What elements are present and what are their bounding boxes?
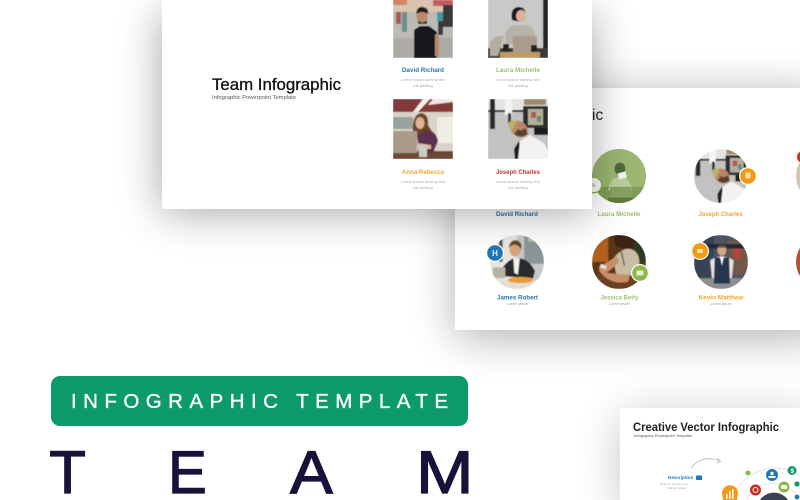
photo: Anna: [393, 99, 453, 159]
caption: Lorem Ipsum: [711, 302, 731, 306]
caption: the printing: [508, 185, 528, 190]
panel: team infographic slide: [162, 0, 592, 212]
badge: infographic template: INFOGRAPHIC TEMPLATE: [71, 390, 448, 413]
team member: James Robert: [486, 235, 544, 306]
icon: chart: [722, 485, 738, 500]
name: Joseph Charles: [496, 169, 540, 176]
team member: partial red row 1: [796, 152, 800, 190]
heading: team infographic: Team Infographic: [212, 76, 341, 94]
text: description: Master Ipsum: [668, 486, 687, 490]
text: subtitle: Infographic Powerpoint Template: [634, 434, 692, 438]
icon: user: [766, 469, 778, 481]
arrow: curved: [691, 458, 720, 468]
name: James Robert: [497, 294, 539, 302]
caption: [401, 179, 446, 190]
icon: Joseph badge: [739, 167, 757, 185]
name: David Richard: [402, 67, 444, 74]
text: description: Description: [668, 475, 693, 480]
team member: Jessica Betty: [592, 235, 649, 306]
icon: Kevin badge: [691, 242, 709, 260]
chart: radial icon arcs: $: [790, 468, 794, 475]
badge: infographic template: [51, 376, 468, 426]
caption: the printing: [413, 185, 433, 190]
icon: Laura badge: %: [591, 183, 596, 189]
photo: Laura: [488, 0, 548, 58]
caption: Lorem Ipsum: [609, 302, 630, 306]
team card: Joseph Charles: [488, 99, 548, 190]
team member: Joseph Charles: [694, 149, 757, 218]
icon: dot green: [746, 470, 750, 476]
chart: radial icon arcs: [722, 466, 800, 500]
team member: Laura Michelle: [592, 149, 646, 216]
team card: Laura Michelle: [488, 0, 548, 88]
icon: dollar: [788, 466, 796, 475]
icon: chat: [778, 482, 790, 492]
team member: partial red row 2: [796, 248, 800, 276]
team member: David Richard name: David Richard: [496, 211, 538, 218]
icon: hub: [760, 493, 788, 500]
icon: target: [750, 484, 761, 496]
text: description: [660, 475, 702, 490]
heading: creative vector infographic: Creative Vector Infographic: [633, 420, 779, 434]
team member: Kevin Matthew: [691, 235, 748, 306]
caption: the printing: [413, 83, 433, 88]
name: Laura Michelle: [598, 211, 641, 218]
caption: [496, 77, 541, 88]
name: Jessica Betty: [600, 294, 639, 302]
text: description: Dolor sit text here for: [660, 482, 688, 486]
text: subtitle: Infographic Powerpoint Template: [212, 95, 296, 101]
caption: [401, 77, 446, 88]
name: Laura Michelle: [496, 67, 540, 74]
team card: Anna Rebecca: [393, 99, 453, 190]
icon: James badge: H: [492, 249, 498, 258]
title: TEAM: [49, 450, 473, 496]
caption: Lorem Ipsum dummy text: [401, 77, 446, 82]
photo: David: [393, 0, 453, 58]
caption: [496, 179, 541, 190]
heading: slide title fragment: ic: [592, 107, 603, 124]
name: Joseph Charles: [698, 211, 743, 218]
caption: Lorem Ipsum dummy text: [496, 179, 541, 184]
photo: Joseph: [488, 99, 548, 159]
icon: dot teal: [794, 481, 800, 487]
panel: creative vector infographic slide: [620, 408, 800, 500]
icon: Jessica badge: [631, 264, 649, 282]
team card: David Richard: [393, 0, 453, 88]
name: Kevin Matthew: [698, 294, 744, 302]
panel: circular team slide: [455, 88, 800, 330]
name: Anna Rebecca: [402, 169, 444, 176]
caption: Lorem Ipsum dummy text: [496, 77, 541, 82]
caption: the printing: [508, 83, 528, 88]
caption: Lorem Ipsum dummy text: [401, 179, 446, 184]
caption: Lorem Ipsum: [507, 302, 528, 306]
